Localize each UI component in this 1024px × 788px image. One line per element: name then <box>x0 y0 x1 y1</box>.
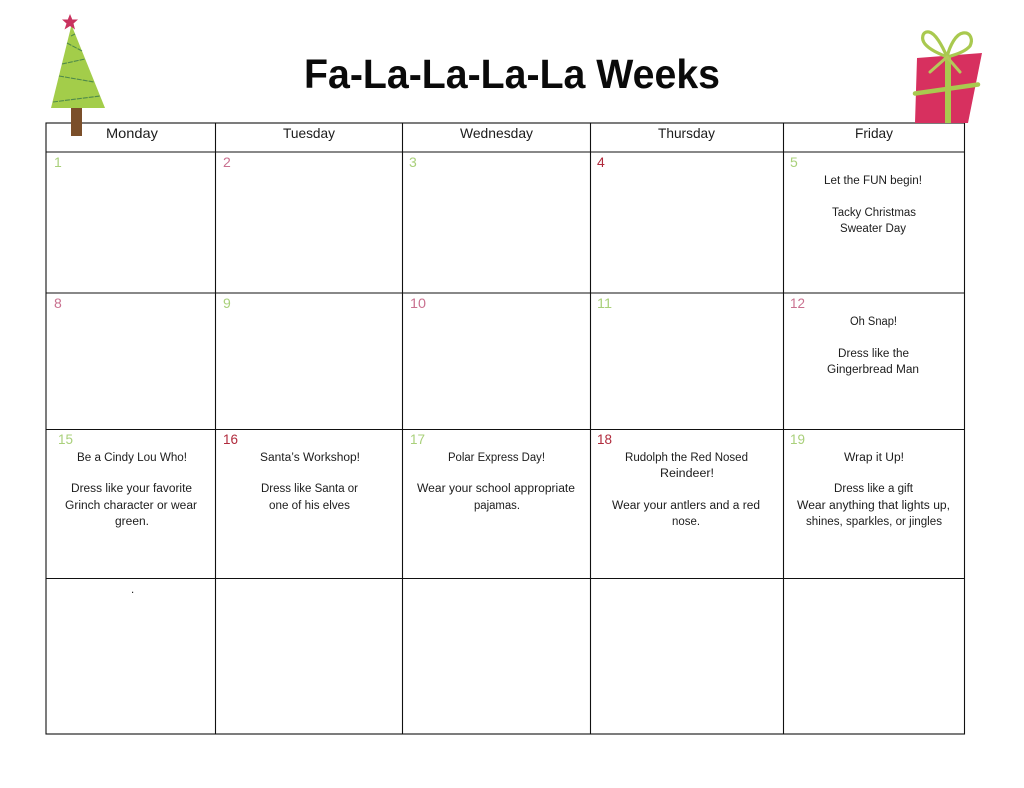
event: Tuesday 16 <box>260 452 360 512</box>
event: Friday 5: Sweater Day <box>840 223 906 235</box>
date numbers: 10 <box>410 295 426 311</box>
icon: christmas tree <box>51 14 105 136</box>
calendar grid <box>46 123 964 734</box>
event: Monday 15 <box>65 452 197 528</box>
event: Friday 12: Oh Snap! <box>850 316 897 328</box>
event: Monday 15: Be a Cindy Lou Who! <box>77 452 187 464</box>
event: Friday 19: Dress like a gift <box>834 483 914 495</box>
date numbers: 3 <box>409 154 417 170</box>
date numbers: 16 <box>223 431 238 447</box>
title: Fa-La-La-La-La Weeks <box>304 51 720 97</box>
event: Monday 15: Dress like your favorite <box>71 483 192 495</box>
date numbers: 15 <box>58 431 73 447</box>
event: Friday 5: Tacky Christmas <box>832 207 916 219</box>
weekday headers: Thursday <box>658 125 715 141</box>
weekday headers: Friday <box>855 125 893 141</box>
date numbers: 4 <box>597 154 605 170</box>
event: Thursday 18: nose. <box>672 516 700 528</box>
event: Thursday 18: Reindeer! <box>660 468 714 480</box>
event: Tuesday 16: Dress like Santa or <box>261 483 358 495</box>
event: Tuesday 16: Santa’s Workshop! <box>260 452 360 464</box>
event: Friday 19: Wear anything that lights up, <box>797 500 950 512</box>
event: Friday 12: Gingerbread Man <box>827 364 919 376</box>
weekday headers: Tuesday <box>283 125 335 141</box>
event: Friday 5: Let the FUN begin! <box>824 175 922 187</box>
event: Friday 19: shines, sparkles, or jingles <box>806 516 942 528</box>
icon: gift box <box>915 32 982 123</box>
date numbers: 17 <box>410 431 425 447</box>
event: Thursday 18 <box>612 452 760 528</box>
event: Tuesday 16: one of his elves <box>269 500 350 512</box>
event: Friday 12 <box>827 316 919 376</box>
date numbers: 5 <box>790 154 798 170</box>
date numbers: 8 <box>54 295 62 311</box>
event: Friday 19: Wrap it Up! <box>844 452 904 464</box>
date numbers: 2 <box>223 154 231 170</box>
event: Thursday 18: Rudolph the Red Nosed <box>625 452 748 464</box>
weekday headers <box>106 125 893 141</box>
event: Wednesday 17: Polar Express Day! <box>448 452 545 464</box>
weekday headers: Monday <box>106 125 158 141</box>
event: Friday 19 <box>797 452 950 528</box>
date numbers: 12 <box>790 295 805 311</box>
event: Monday 15: Grinch character or wear <box>65 500 197 512</box>
event: Friday 5 <box>824 175 922 235</box>
weekday headers: Wednesday <box>460 125 533 141</box>
event: Monday 15: green. <box>115 516 149 528</box>
date numbers: 9 <box>223 295 231 311</box>
event: Wednesday 17 <box>417 452 575 512</box>
stray dot in week 4 Monday cell: . <box>131 584 134 596</box>
date numbers: 1 <box>54 154 62 170</box>
event: Wednesday 17: pajamas. <box>474 500 520 512</box>
date numbers: 19 <box>790 431 805 447</box>
event: Friday 12: Dress like the <box>838 348 909 360</box>
date numbers: 11 <box>597 295 612 311</box>
date numbers: 18 <box>597 431 612 447</box>
event: Wednesday 17: Wear your school appropriate <box>417 483 575 495</box>
event: Thursday 18: Wear your antlers and a red <box>612 500 760 512</box>
date numbers <box>54 154 805 447</box>
